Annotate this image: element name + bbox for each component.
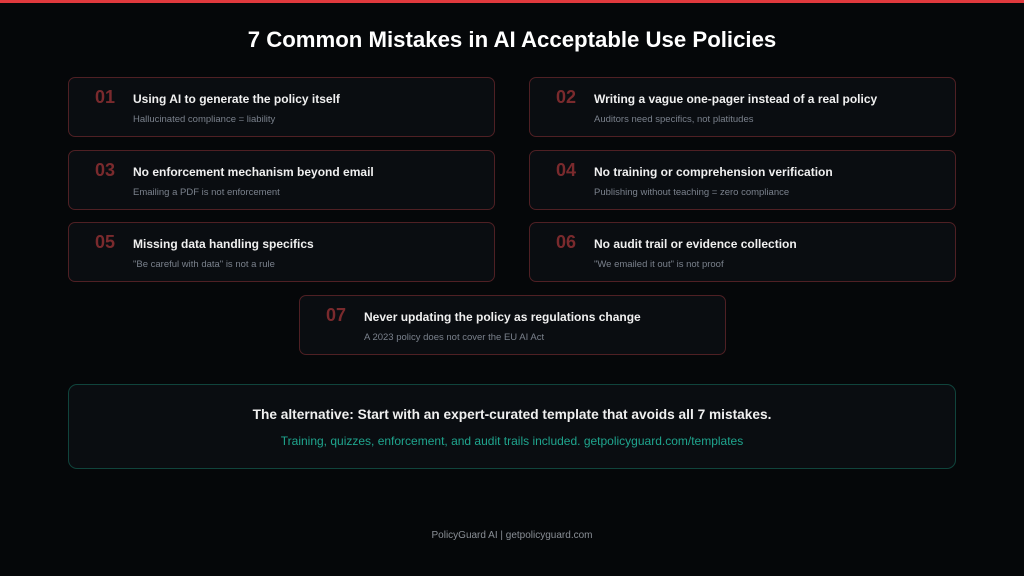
card 02: Auditors need specifics, not platitudes — [594, 114, 753, 125]
card 07 — [299, 295, 726, 355]
card 07: Never updating the policy as regulations change — [364, 310, 641, 324]
card 05 — [68, 222, 495, 282]
card 01: Hallucinated compliance = liability — [133, 114, 275, 125]
card 07: 07 — [326, 305, 346, 325]
card 05: 05 — [95, 232, 115, 252]
footer: PolicyGuard AI | getpolicyguard.com — [431, 530, 592, 541]
callout: alternative: The alternative: Start with an expert-curated template that avoids all 7 mistakes. — [253, 407, 771, 422]
title: 7 Common Mistakes in AI Acceptable Use Policies — [248, 27, 776, 52]
card 06: No audit trail or evidence collection — [594, 237, 797, 251]
card 06: "We emailed it out" is not proof — [594, 259, 724, 270]
card 02: Writing a vague one-pager instead of a real policy — [594, 92, 877, 106]
card 03: No enforcement mechanism beyond email — [133, 165, 374, 179]
card 03: 03 — [95, 160, 115, 180]
card 04: No training or comprehension verification — [594, 165, 833, 179]
card 05: "Be careful with data" is not a rule — [133, 259, 275, 270]
card 03 — [68, 150, 495, 210]
card 05: Missing data handling specifics — [133, 237, 314, 251]
card 03: Emailing a PDF is not enforcement — [133, 187, 280, 198]
callout: alternative — [68, 384, 956, 469]
card 04: 04 — [556, 160, 576, 180]
card 02 — [529, 77, 956, 137]
card 04: Publishing without teaching = zero compliance — [594, 187, 789, 198]
card 07: A 2023 policy does not cover the EU AI Act — [364, 332, 544, 343]
card 01: 01 — [95, 87, 115, 107]
card 04 — [529, 150, 956, 210]
card 06 — [529, 222, 956, 282]
callout: alternative: Training, quizzes, enforcement, and audit trails included. getpolicyguard.com/templates — [281, 434, 743, 448]
card 06: 06 — [556, 232, 576, 252]
card 01: Using AI to generate the policy itself — [133, 92, 340, 106]
card 02: 02 — [556, 87, 576, 107]
card 01 — [68, 77, 495, 137]
